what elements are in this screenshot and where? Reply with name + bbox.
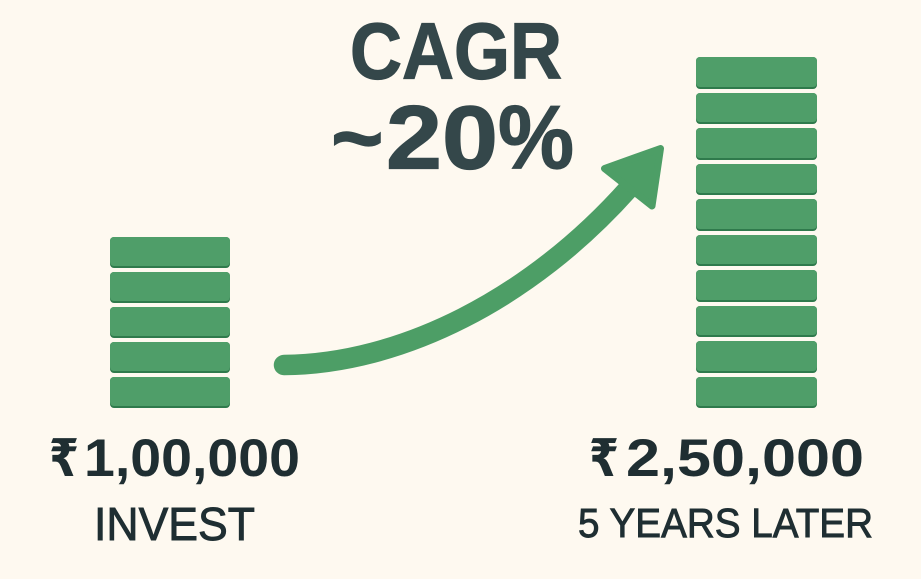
title: ~20%: ~ <box>331 88 384 188</box>
label: 5 YEARS LATER: 5 YEARS LATER <box>578 500 873 546</box>
label: initial amount: ₹ <box>49 430 79 488</box>
label: initial amount: 1,00,000 <box>84 429 300 488</box>
label: final amount: ₹ <box>589 430 619 488</box>
stack: initial investment <box>110 237 230 408</box>
title: CAGR: CAGR <box>350 6 562 96</box>
title: ~20%: % <box>498 88 574 188</box>
arrow: growth curve <box>284 148 660 365</box>
title: ~20%: 20 <box>386 88 498 188</box>
label: final amount: 2,50,000 <box>626 429 864 488</box>
stack: value after 5 years <box>696 57 817 408</box>
label: INVEST: INVEST <box>94 498 255 550</box>
